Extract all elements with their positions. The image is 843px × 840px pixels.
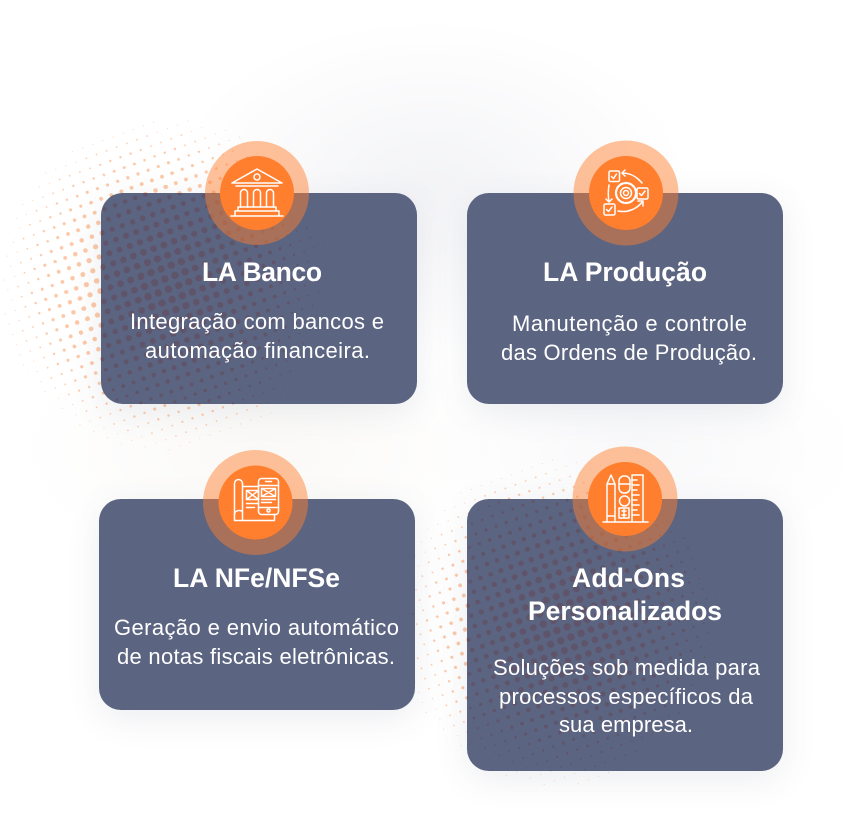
heading xyxy=(528,563,722,626)
icon: design tools xyxy=(572,446,678,552)
card content: Add-Ons Personalizados xyxy=(493,446,761,737)
text block: de notas fiscais eletrônicas. xyxy=(117,644,395,669)
panel: Add-Ons Personalizados xyxy=(467,499,783,771)
text block xyxy=(501,311,757,365)
heading: Add-Ons xyxy=(572,563,685,593)
icon: workflow gear xyxy=(574,140,678,246)
icon: bank xyxy=(205,141,309,245)
panel: LA Produção xyxy=(467,193,783,404)
text block xyxy=(114,615,399,669)
text block: Geração e envio automático xyxy=(114,615,399,640)
heading: LA Banco xyxy=(202,257,322,287)
text block: das Ordens de Produção. xyxy=(501,340,757,365)
panel: LA NFe/NFSe xyxy=(99,499,415,710)
text block: sua empresa. xyxy=(559,712,693,737)
halftone blob right xyxy=(398,458,726,786)
text block: processos específicos da xyxy=(499,684,754,709)
card content: LA Banco xyxy=(130,141,384,363)
text block xyxy=(493,655,761,737)
heading: LA Produção xyxy=(543,257,707,287)
card contents xyxy=(101,140,760,771)
text block xyxy=(130,309,384,363)
card content: LA Produção xyxy=(501,140,757,365)
halftone dots showing through panels xyxy=(101,193,724,771)
heading: LA NFe/NFSe xyxy=(173,563,340,593)
halftone blobs xyxy=(1,119,726,786)
text block: Soluções sob medida para xyxy=(493,655,761,680)
text block: Integração com bancos e xyxy=(130,309,384,334)
icon: blueprint and phone xyxy=(203,450,308,555)
heading: Personalizados xyxy=(528,596,722,626)
halftone blob left xyxy=(1,119,333,451)
text block: automação financeira. xyxy=(145,338,370,363)
panel: LA Banco xyxy=(101,193,417,404)
text block: Manutenção e controle xyxy=(512,311,747,336)
card content: LA NFe/NFSe xyxy=(114,450,399,669)
